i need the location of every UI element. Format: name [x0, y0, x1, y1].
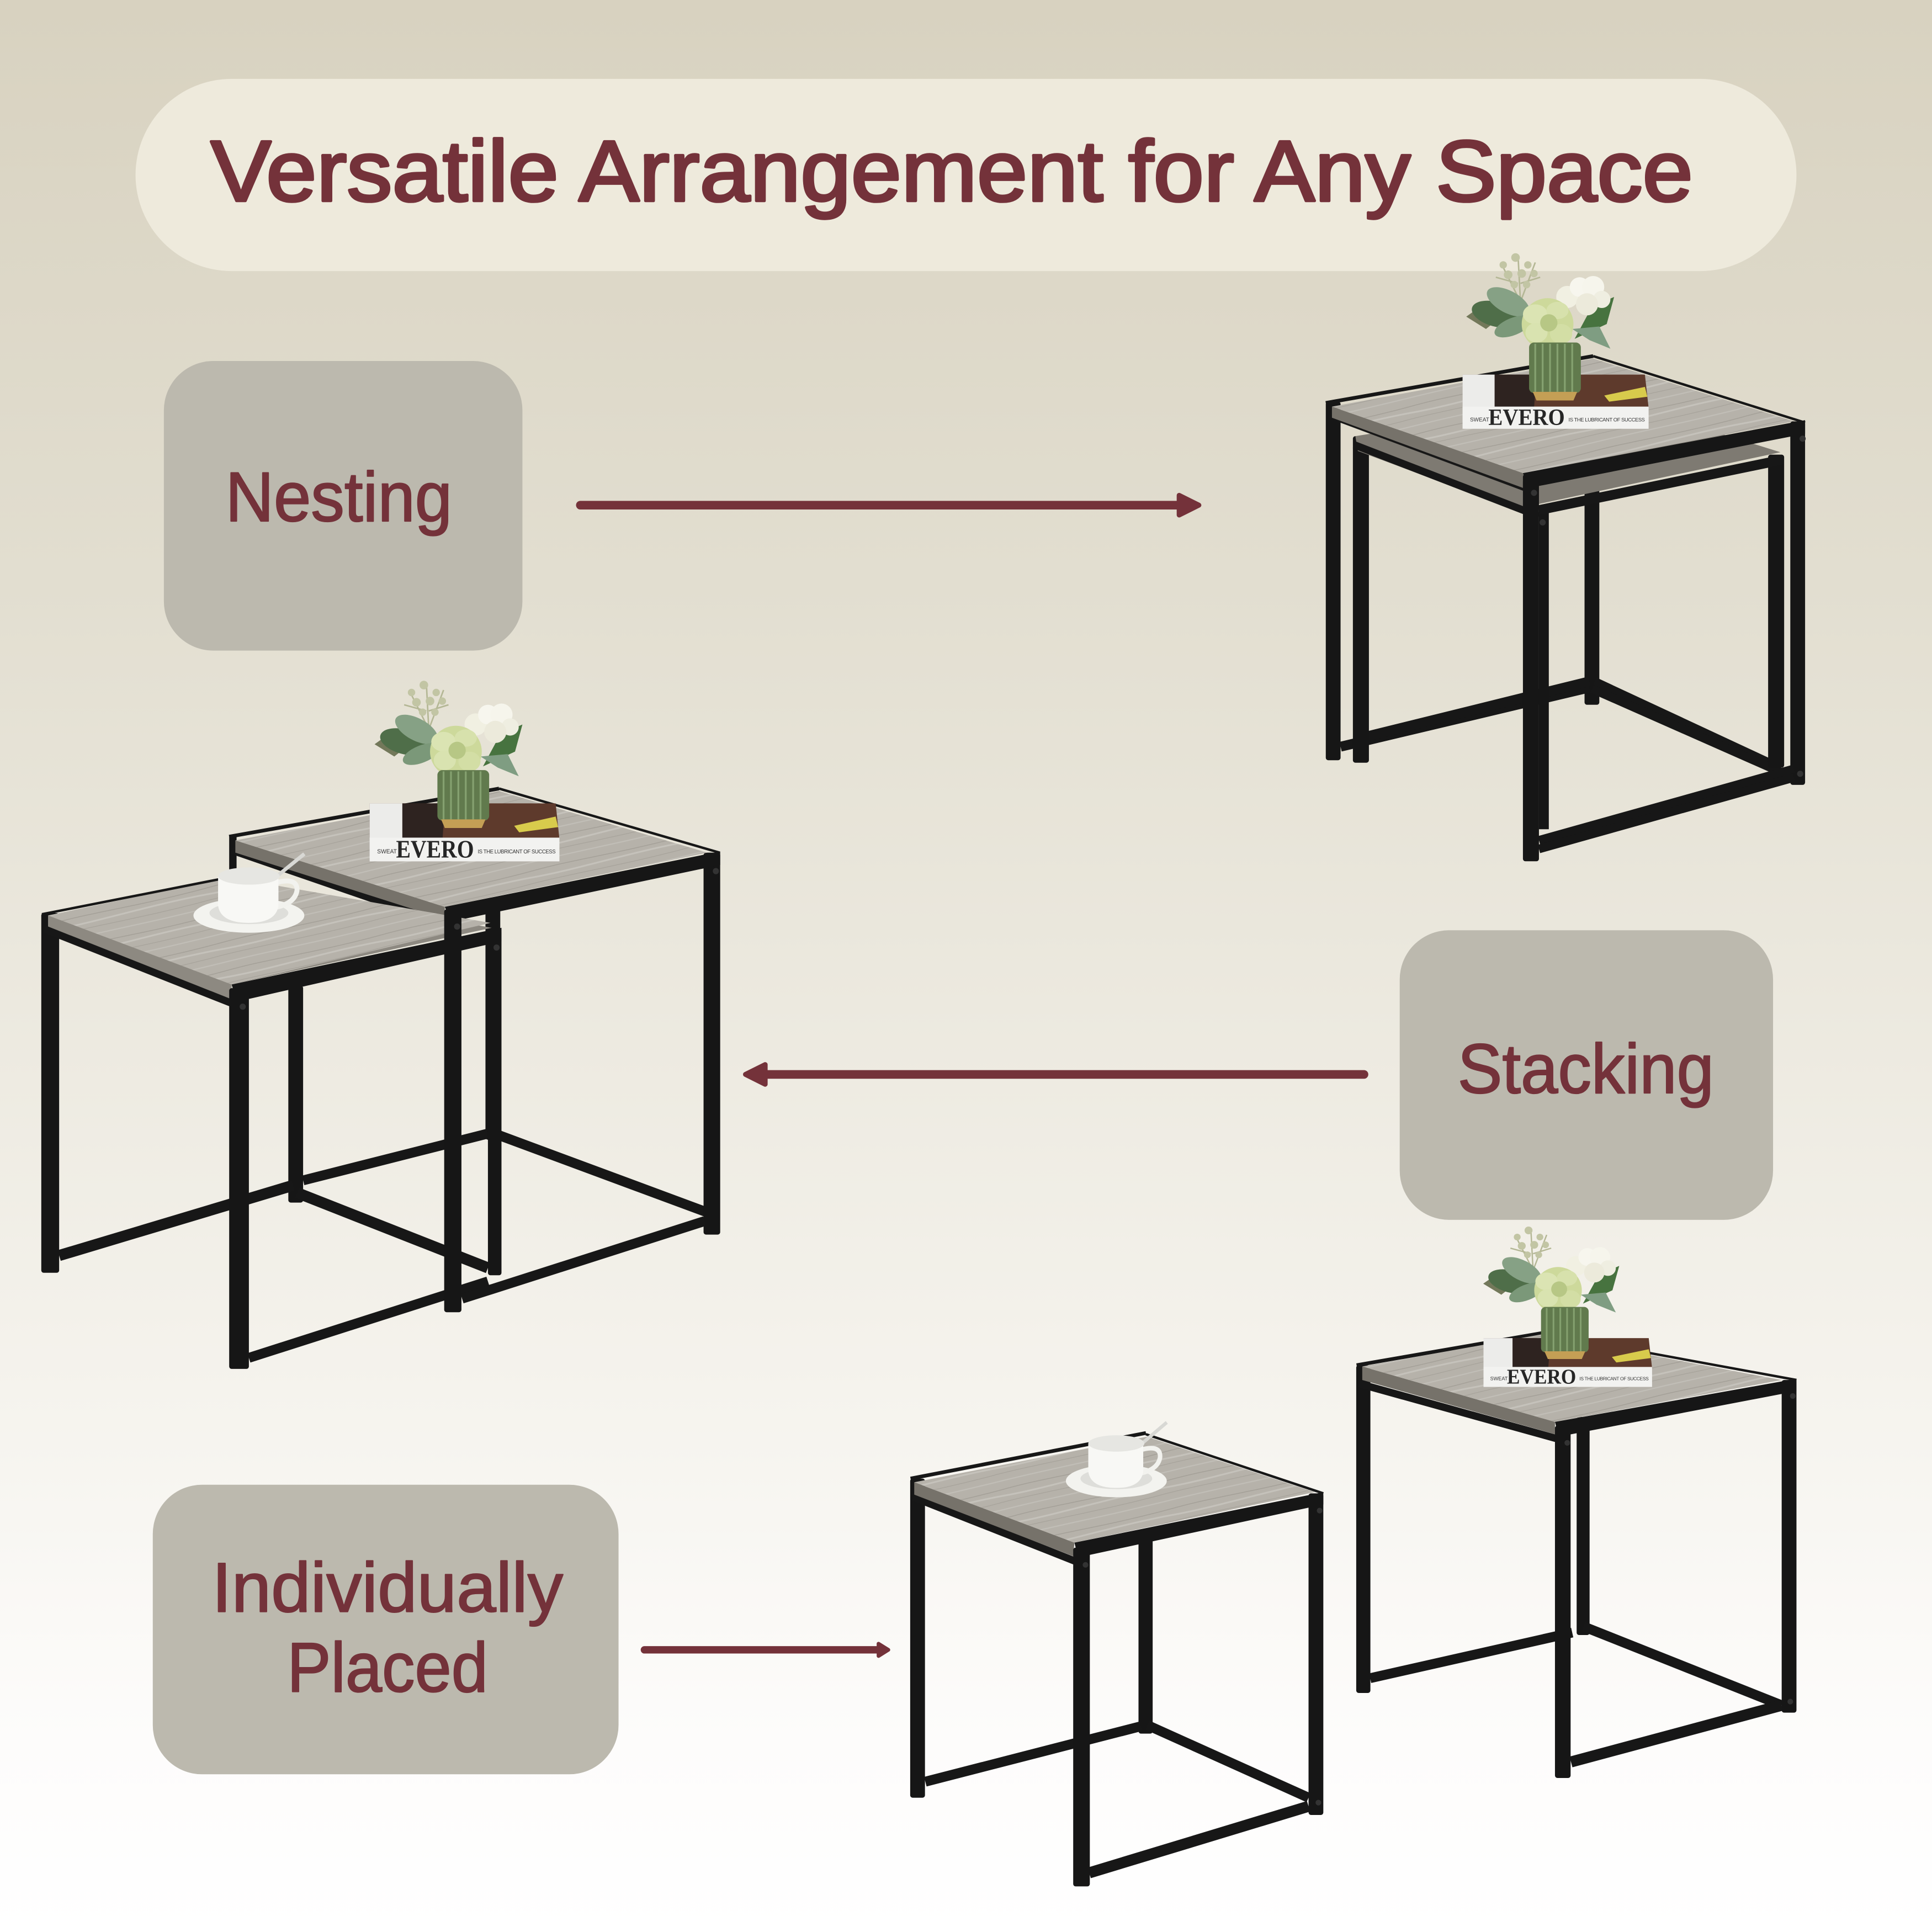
nesting tables illustration [1326, 356, 1806, 861]
book: nesting: SWEAT [1470, 417, 1489, 423]
icon: flower vase stacking [375, 681, 522, 828]
panel: individually placed label: Placed [287, 1628, 488, 1707]
arrow: nesting [580, 495, 1199, 515]
book: stacking: SWEAT [377, 849, 397, 855]
panel: individually placed label [153, 1485, 619, 1774]
book: nesting: EVERO [1488, 405, 1565, 431]
icon: cup individually placed [1066, 1423, 1167, 1497]
panel: nesting label [164, 361, 522, 651]
book: stacking [370, 803, 559, 863]
book: nesting [1463, 375, 1649, 431]
panel: nesting label: Nesting [225, 458, 452, 536]
small table illustration [910, 1433, 1323, 1886]
book: individually placed: EVERO [1507, 1366, 1576, 1388]
icon: flower vase individually placed [1483, 1227, 1619, 1359]
book: individually placed [1484, 1338, 1652, 1388]
book: individually placed: SWEAT [1490, 1376, 1508, 1381]
title: Versatile Arrangement for Any Space [211, 124, 1693, 220]
book: individually placed: IS THE LUBRICANT OF SUCCESS [1579, 1376, 1649, 1381]
book: nesting: IS THE LUBRICANT OF SUCCESS [1569, 417, 1645, 422]
icon: flower vase nesting [1466, 253, 1614, 400]
icon: cup stacking [193, 854, 304, 933]
arrow: individually placed [644, 1644, 888, 1656]
panel: stacking label: Stacking [1458, 1029, 1714, 1108]
panel: individually placed label: Individually [212, 1548, 563, 1627]
book: stacking: IS THE LUBRICANT OF SUCCESS [477, 849, 556, 855]
stacking tables illustration [41, 789, 720, 1369]
book: stacking: EVERO [396, 835, 474, 863]
large table illustration [1356, 1333, 1796, 1778]
title banner [136, 79, 1796, 271]
arrow: stacking [745, 1065, 1364, 1084]
panel: stacking label [1400, 930, 1773, 1220]
